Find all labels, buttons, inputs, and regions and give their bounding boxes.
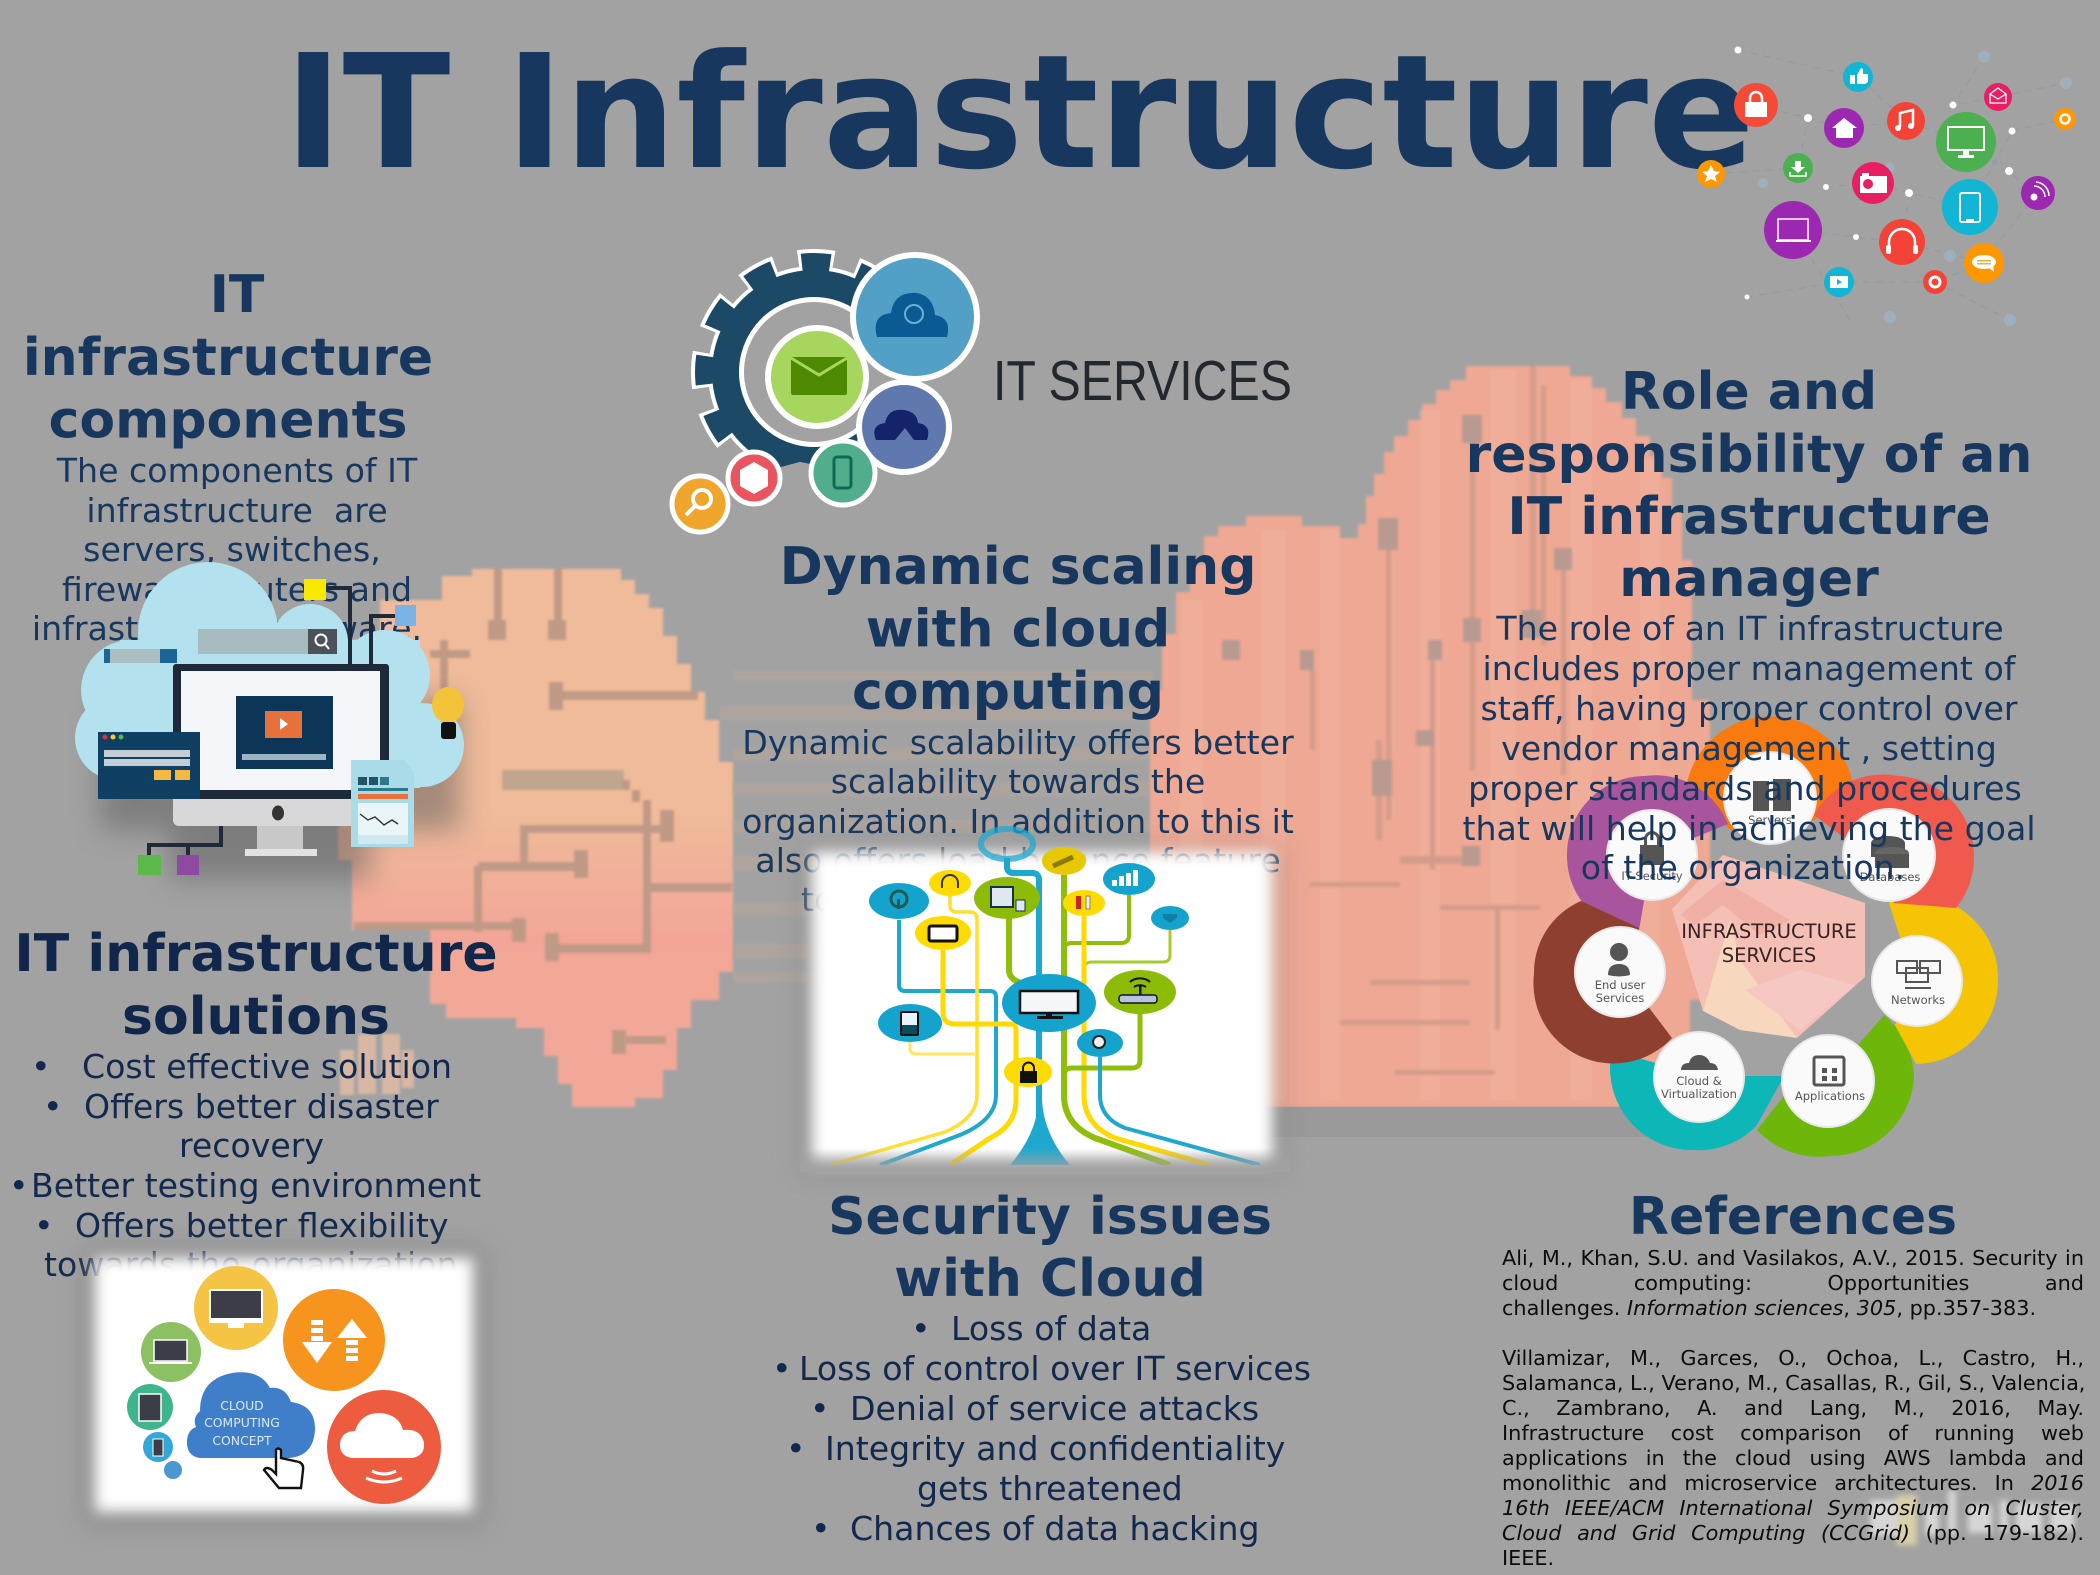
solutions list: • (34, 1206, 54, 1245)
wheel: labels: Virtualization (1661, 1087, 1737, 1101)
yellow monitor circle (194, 1266, 278, 1350)
red hexagon circle (728, 452, 780, 504)
background band under hand shape (1270, 1107, 1650, 1137)
wheel: labels: Databases (1860, 870, 1920, 884)
wheel: service icons (1608, 779, 1940, 1085)
icon: headphones (1879, 219, 1925, 265)
references text: Infrastructure cost comparison of running web (1502, 1421, 2084, 1445)
section: References (1502, 1187, 2084, 1574)
picture: network tree (800, 829, 1290, 1176)
icon: laptop (1764, 201, 1822, 259)
hand cursor (264, 1448, 303, 1488)
picture: cloud computing concept (84, 1248, 484, 1526)
blue concept cloud: CONCEPT (212, 1433, 272, 1448)
light bulb (432, 687, 464, 739)
illustration: cloud with monitor (75, 562, 464, 880)
tree picture white background (812, 852, 1272, 1164)
role body: that will help in achieving the goal (1462, 809, 2036, 848)
connector wires (149, 588, 395, 857)
concept picture white background (95, 1258, 473, 1512)
orange arrows circle (283, 1289, 385, 1391)
green envelope circle (768, 328, 866, 426)
section: IT infrastructure components (23, 265, 433, 648)
tree picture edge shadow (800, 846, 1284, 1176)
icon: chat (1964, 243, 2004, 283)
wheel: coloured ring segments (1533, 716, 1998, 1157)
references text: Villamizar, M., Garces, O., Ochoa, L., Castro, H., (1502, 1346, 2084, 1370)
role body (1462, 609, 2036, 887)
security list: Loss of data (951, 1309, 1151, 1348)
main title: IT Infrastructure (284, 22, 1755, 205)
solutions list: • (9, 1166, 29, 1205)
tree picture bottom fade (800, 1148, 1290, 1172)
references text: C., Zambrano, A. and Lang, M., 2016, May. (1502, 1396, 2084, 1420)
icon: green monitor (1936, 112, 1996, 172)
wheel: labels: Services (1596, 991, 1644, 1005)
role body: proper standards and procedures (1468, 769, 2022, 808)
solutions heading: solutions (122, 987, 390, 1047)
solutions heading: IT infrastructure (14, 924, 498, 984)
role heading: IT infrastructure (1507, 487, 1991, 547)
references text (1502, 1246, 2084, 1574)
section: IT infrastructure solutions (9, 924, 498, 1284)
security list: Integrity and confidentiality (825, 1429, 1285, 1468)
background graphic: pixelated brain with circuit traces (338, 569, 733, 1107)
references heading: References (1629, 1187, 1957, 1247)
security heading (828, 1187, 1272, 1309)
dynamic scaling body: also offers load balance feature (755, 841, 1281, 880)
concept picture edge shadow (84, 1248, 484, 1526)
components heading: infrastructure (23, 328, 433, 388)
blue cloud circle (853, 255, 977, 379)
components heading: components (49, 390, 407, 450)
role body: staff, having proper control over (1480, 689, 2018, 728)
teal tablet circle (127, 1384, 173, 1430)
icon: thumbs up (1843, 62, 1873, 92)
blue concept cloud (187, 1372, 315, 1458)
solutions list: Offers better disaster (84, 1087, 439, 1126)
search bar (198, 629, 337, 654)
security list: • (911, 1309, 931, 1348)
security list: • (811, 1509, 831, 1548)
blue concept cloud: COMPUTING (204, 1415, 280, 1430)
references text: Ali, M., Khan, S.U. and Vasilakos, A.V., 2015. Security in (1502, 1246, 2084, 1270)
section: Role and responsibility (1462, 362, 2036, 887)
role body: vendor management , setting (1501, 729, 1997, 768)
icon: home (1824, 108, 1864, 148)
role heading: manager (1619, 549, 1879, 609)
wheel: labels: Cloud & (1676, 1074, 1722, 1088)
security heading: Security issues (828, 1187, 1272, 1247)
components body: infrastructure are (86, 491, 388, 530)
components heading (23, 265, 433, 450)
browser window (98, 732, 200, 799)
icon: video (1824, 267, 1854, 297)
background graphic: small pixel fragment lower left (340, 1034, 414, 1095)
solutions list: Better testing environment (31, 1166, 481, 1205)
dynamic scaling body: scalability towards the (831, 762, 1205, 801)
references text: cloud computing: Opportunities and (1502, 1271, 2084, 1295)
green laptop circle (141, 1322, 201, 1382)
icon: lock (1734, 83, 1778, 127)
role body: includes proper management of (1483, 649, 2017, 688)
orange magnifier circle (672, 476, 728, 532)
references text: applications in the cloud using AWS lambda and (1502, 1446, 2084, 1470)
dynamic scaling body: Dynamic scalability offers better (742, 723, 1294, 762)
wheel: labels: End user (1595, 978, 1646, 992)
wheel: labels: Networks (1891, 993, 1945, 1007)
security heading: with Cloud (894, 1249, 1206, 1309)
dynamic scaling heading: computing (852, 662, 1164, 722)
globe (164, 1461, 182, 1479)
solutions heading (14, 924, 498, 1047)
role heading: Role and (1621, 362, 1877, 422)
infrastructure services wheel diagram (1533, 716, 1998, 1157)
section: Dynamic scaling with cloud computing (742, 537, 1294, 919)
role heading (1466, 362, 2032, 609)
icon: mobile (1942, 179, 1998, 235)
network connecting lines (1711, 50, 2066, 320)
icon: mail (1984, 83, 2012, 111)
report document (351, 760, 414, 847)
solutions list: • (31, 1047, 51, 1086)
components heading: IT (210, 265, 265, 325)
dynamic scaling heading: Dynamic scaling (780, 537, 1256, 597)
references text: monolithic and microservice architectures. In 2016 (1502, 1471, 2084, 1495)
components body: infrastructure software. (32, 609, 422, 648)
wheel: centre title: INFRASTRUCTURE (1681, 920, 1857, 943)
references text: challenges. Information sciences, 305, pp.357-383. (1502, 1296, 2036, 1320)
tree branches (830, 829, 1260, 1165)
background graphic: faint circuit bands between shapes (720, 670, 1153, 982)
icon: star (1697, 160, 1725, 188)
cloud shadow (100, 700, 460, 880)
solutions list: Offers better flexibility (75, 1206, 448, 1245)
references text: Cloud and Grid Computing (CCGrid) (pp. 179-182). (1502, 1521, 2084, 1545)
icon: camera (1852, 162, 1894, 204)
background graphic: pixelated circuit hand shape (1150, 366, 1710, 1107)
blue concept cloud: CLOUD (220, 1398, 264, 1413)
cloud shape (75, 562, 464, 788)
references text: 16th IEEE/ACM International Symposium on Cluster, (1502, 1496, 2084, 1520)
role body: of the organization. (1581, 848, 1905, 887)
icon: music (1887, 102, 1925, 140)
logo text: IT SERVICES (993, 349, 1292, 413)
section: Security issues with Cloud (772, 1187, 1311, 1548)
tree branches and nodes (830, 829, 1260, 1165)
role body: The role of an IT infrastructure (1495, 609, 2004, 648)
teal phone circle (811, 441, 875, 505)
solutions list: Cost effective solution (82, 1047, 452, 1086)
white network dots (1734, 46, 2016, 300)
wheel: labels: IT Security (1621, 869, 1683, 883)
wheel: white service circles (1575, 752, 1962, 1127)
illustration: IT services gear logo (672, 252, 1292, 532)
network of coloured app icons (1697, 46, 2076, 326)
address bar (104, 649, 177, 663)
icon: download (1783, 153, 1813, 183)
security list: Chances of data hacking (850, 1509, 1260, 1548)
role heading: responsibility of an (1466, 425, 2032, 485)
wheel: labels (1595, 813, 1945, 1103)
wheel: central pink hexagon (1672, 855, 1865, 1038)
dynamic scaling heading: with cloud (866, 600, 1170, 660)
solutions list: • (43, 1087, 63, 1126)
security list: Denial of service attacks (850, 1389, 1259, 1428)
pale network nodes (1758, 51, 2072, 326)
red cloud circle (327, 1390, 441, 1504)
monitor (173, 664, 389, 856)
solutions list: recovery (179, 1126, 324, 1165)
blue phone circle (143, 1432, 173, 1462)
icon: orange ring (2054, 108, 2076, 130)
icon: gear (1923, 270, 1947, 294)
connector squares (138, 579, 416, 875)
components body: firewalls, routers and (62, 570, 412, 609)
security list: • (786, 1429, 806, 1468)
wheel: centre title (1681, 920, 1857, 967)
security list: Loss of control over IT services (799, 1349, 1311, 1388)
wheel: labels: Applications (1795, 1089, 1865, 1103)
security list: • (810, 1389, 830, 1428)
tree nodes (869, 847, 1189, 1087)
security list (772, 1309, 1311, 1548)
dynamic scaling body: organization. In addition to this it (742, 802, 1294, 841)
solutions list: towards the organization (44, 1245, 458, 1284)
security list: • (772, 1349, 792, 1388)
components body (32, 451, 422, 648)
components body: servers, switches, (83, 530, 381, 569)
purple cloud circle (859, 382, 949, 472)
faint watermark bottom right (1870, 1490, 2074, 1545)
security list: gets threatened (917, 1469, 1183, 1508)
dynamic scaling heading (780, 537, 1256, 722)
references text: IEEE. (1502, 1546, 1554, 1570)
wheel: centre title: SERVICES (1722, 944, 1816, 967)
references text: Salamanca, L., Verano, M., Casallas, R., Gil, S., Valencia, (1502, 1371, 2084, 1395)
dynamic scaling body: to the entire organization (801, 880, 1224, 919)
icon: rss (2021, 176, 2055, 210)
solutions list (9, 1047, 481, 1284)
gear (691, 249, 876, 468)
wheel: labels: Servers (1748, 813, 1792, 827)
components body: The components of IT (56, 451, 418, 490)
dynamic scaling body (742, 723, 1294, 919)
